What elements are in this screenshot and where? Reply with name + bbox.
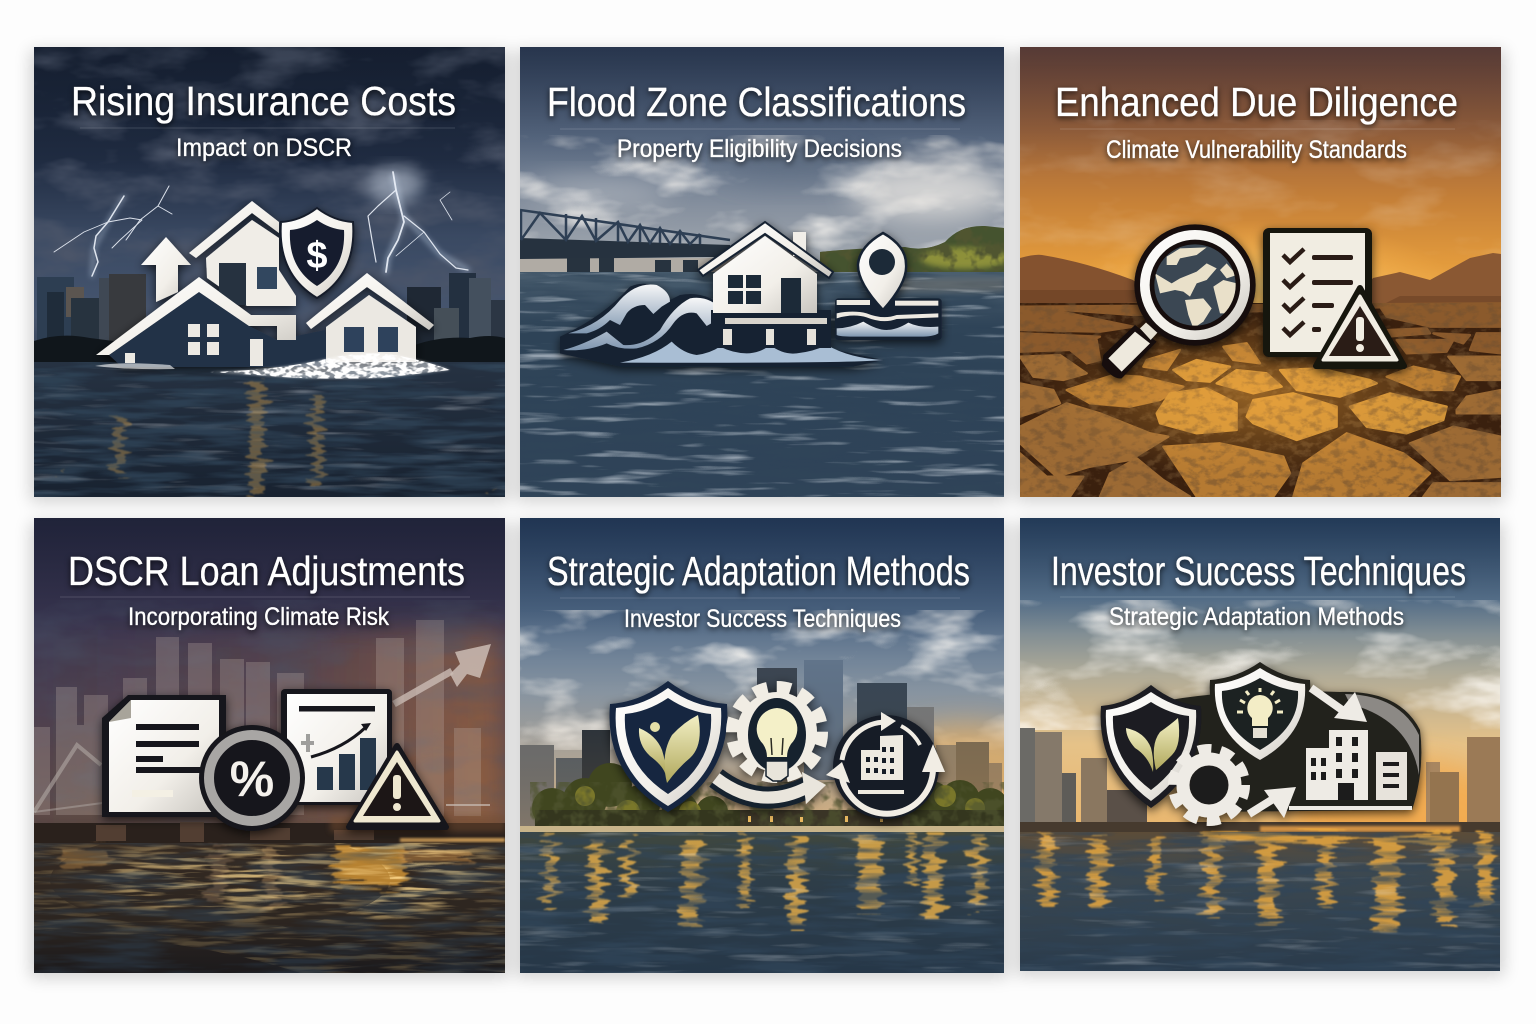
- heading: strategic adaptation methods: Strategic Adaptation Methods: [547, 548, 970, 594]
- icon: checklist: [1263, 228, 1372, 357]
- icon: right house: [306, 273, 434, 362]
- icon: leaf shield: [1101, 685, 1201, 808]
- icon: leaf shield: [609, 681, 727, 812]
- icon: dollar shield: [281, 208, 353, 298]
- panel: investor success techniques: [1020, 518, 1510, 971]
- subheading: investor success techniques: Investor Success Techniques: [624, 605, 901, 633]
- icon: cloud rim: [1345, 694, 1419, 775]
- icon: magnifying glass and checklist with warning: [1102, 224, 1404, 378]
- panel: DSCR loan adjustments: [34, 518, 505, 973]
- icon: warning triangle: [1316, 288, 1404, 366]
- bridge: [520, 208, 730, 272]
- icon: gear with bulb: [732, 687, 822, 781]
- icon: flooded houses with rising arrow and dollar shield: [96, 201, 434, 367]
- icon: gear: [1174, 750, 1244, 820]
- city skyline: [34, 273, 505, 363]
- icon: bulb shield: [1210, 662, 1310, 767]
- icon: office buildings: [1289, 730, 1412, 810]
- icon: waves: [560, 284, 883, 367]
- shoreline: [34, 816, 505, 845]
- subheading: climate vulnerability standards: Climate Vulnerability Standards: [1106, 136, 1407, 164]
- icon: location pin: [858, 233, 906, 310]
- icon: house on stilts: [698, 222, 833, 348]
- icon: rising arrow: [141, 237, 191, 302]
- icon: loan document: [102, 695, 226, 817]
- icon: water lines: [835, 298, 942, 340]
- icon: leaf shield, bulb gear, building cycle: [609, 681, 945, 819]
- panel: strategic adaptation methods: [520, 518, 1055, 973]
- tree line: [520, 763, 1008, 832]
- background bars and trend arrow: [34, 620, 491, 816]
- icon: dark cloud with shields, gear, buildings: [1101, 662, 1421, 820]
- subheading: impact on DSCR: Impact on DSCR: [176, 134, 352, 162]
- subheading: property eligibility decisions: Property Eligibility Decisions: [617, 135, 902, 163]
- icon: flooded house with waves and location pin: [560, 222, 942, 367]
- icon: chart document: [281, 689, 392, 805]
- icon: curved process arrow: [716, 772, 826, 804]
- subheading: strategic adaptation methods: Strategic Adaptation Methods: [1109, 603, 1404, 631]
- heading: DSCR loan adjustments: DSCR Loan Adjustments: [68, 548, 465, 594]
- panel: rising insurance costs: [34, 47, 505, 497]
- flood spray: [95, 353, 450, 379]
- icon: building cycle: [826, 712, 945, 819]
- icon: percent circle: [199, 725, 305, 831]
- icon: warning triangle: [349, 746, 446, 827]
- city skyline: [520, 660, 1004, 832]
- icon: up arrow: [1249, 787, 1296, 818]
- heading: flood zone classifications: Flood Zone Classifications: [547, 79, 966, 125]
- icon: magnifier with globe: [1102, 224, 1256, 378]
- city skyline: [1020, 728, 1500, 834]
- cracked earth tiles: [1020, 303, 1501, 497]
- subheading: incorporating climate risk: Incorporating Climate Risk: [128, 603, 389, 631]
- tree bank: [820, 226, 1010, 274]
- mountains: [1020, 253, 1501, 306]
- icon: dollar shield: $: [306, 235, 328, 277]
- icon: loan document, percent, chart and warning: [102, 689, 446, 831]
- icon: percent circle: %: [230, 751, 274, 807]
- heading: enhanced due diligence: Enhanced Due Diligence: [1055, 79, 1458, 125]
- heading: rising insurance costs: Rising Insurance Costs: [71, 78, 456, 124]
- panel: flood zone classifications: [520, 47, 1010, 497]
- icon: down arrow: [1311, 688, 1367, 722]
- icon: front house: [96, 277, 330, 367]
- icon: dark cloud backdrop: [1170, 691, 1421, 812]
- icon: back house: [189, 201, 296, 306]
- panel: enhanced due diligence: [1020, 47, 1501, 497]
